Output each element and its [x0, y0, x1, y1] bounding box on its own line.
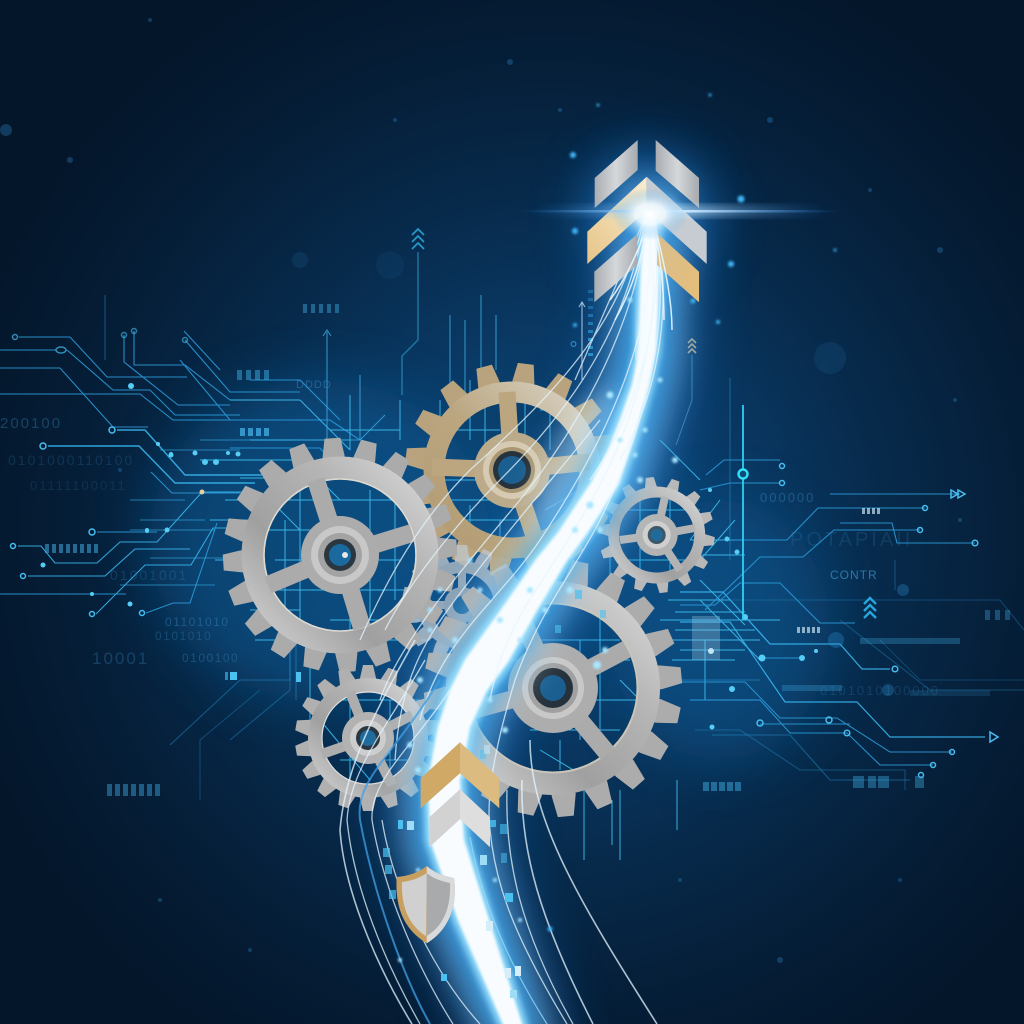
panel: glowing particles around beam — [398, 94, 836, 962]
top arrow: lower left silver wing — [594, 234, 637, 302]
panel: faint binary digits: 10001 — [92, 649, 149, 668]
panel: bright data squares along beam — [225, 590, 606, 998]
icon: right circuit glowing vertical line with ring node — [738, 405, 748, 620]
gear: small bottom-left silver — [295, 665, 441, 811]
panel: left circuit board traces — [0, 295, 360, 800]
top arrow: upper right silver chevron wing — [656, 140, 699, 208]
pale haze over gears near beam — [430, 210, 657, 1024]
panel: right circuit glowing dots — [692, 488, 818, 730]
mid blue glow of light beam — [430, 210, 657, 1024]
panel: faint binary digits: POTAPIAII — [790, 529, 913, 551]
blue glow behind left gear — [150, 380, 490, 700]
panel: faint binary digits: 000000 — [760, 490, 815, 505]
horizontal lens flare — [520, 205, 840, 217]
top arrow: middle chevron left gold wing — [587, 177, 647, 264]
gear: small right silver — [598, 477, 715, 593]
panel: left circuit glowing dots — [40, 383, 240, 606]
icon: chevrons with vertical line upper left — [402, 229, 424, 395]
gear: large bottom-right silver — [423, 558, 683, 818]
top arrow: lower right gold wing — [657, 234, 699, 302]
icon: gold chevrons with line right of beam — [676, 339, 696, 445]
panel: faint binary digits: 01101010 — [165, 615, 230, 629]
panel: faint binary digits: 01111100011 — [30, 478, 127, 493]
panel: faint binary digits: 0101010100000 — [820, 683, 940, 698]
panel: data blocks scattered over the background — [45, 304, 1010, 796]
top arrow upper beam strands — [610, 215, 672, 360]
soft wide blue glow behind beam — [430, 210, 657, 1024]
panel: faint binary digits: DDDD — [296, 379, 332, 391]
panel: faint binary digits: 0101010 — [155, 629, 212, 643]
panel: faint binary digits: CONTR — [830, 568, 878, 582]
pale cyan halo of light beam — [430, 210, 657, 1024]
soft glow behind top arrow — [586, 153, 710, 277]
gear: top gold — [404, 362, 620, 578]
blue glow behind right circuitry — [610, 500, 830, 760]
star burst at arrow tip — [612, 188, 688, 240]
gear: middle small translucent — [402, 545, 522, 665]
panel: left circuit nodes — [10, 328, 188, 616]
panel: faint binary digits: 0100100 — [182, 651, 239, 665]
top arrow: upper left silver chevron wing — [595, 140, 638, 208]
wash of light over right side of gold gear — [513, 376, 657, 564]
light beam core — [430, 210, 657, 1024]
icon: shield — [396, 866, 455, 943]
panel: data column beside top arrow — [588, 290, 593, 356]
panel: faint binary digits — [0, 379, 940, 698]
bottom chevron: silver — [429, 789, 490, 847]
top arrow: middle chevron right silver wing — [647, 177, 707, 264]
bottom chevron: gold — [421, 742, 499, 808]
panel: vertical arrow lines above the gears — [300, 295, 585, 440]
panel: faint binary digits: 01001001 — [110, 567, 188, 583]
icon: chevrons on right circuit — [864, 598, 876, 618]
panel: dense bright circuitry behind the gears — [200, 380, 780, 860]
panel: right circuit nodes — [757, 464, 998, 778]
right circuit traces — [680, 378, 1024, 790]
panel: thin light strands — [340, 215, 663, 1024]
panel: faint binary digits: 200100 — [0, 415, 62, 432]
panel: faint binary digits: 0101000110100 — [8, 452, 134, 468]
gear: large left silver — [223, 438, 457, 672]
